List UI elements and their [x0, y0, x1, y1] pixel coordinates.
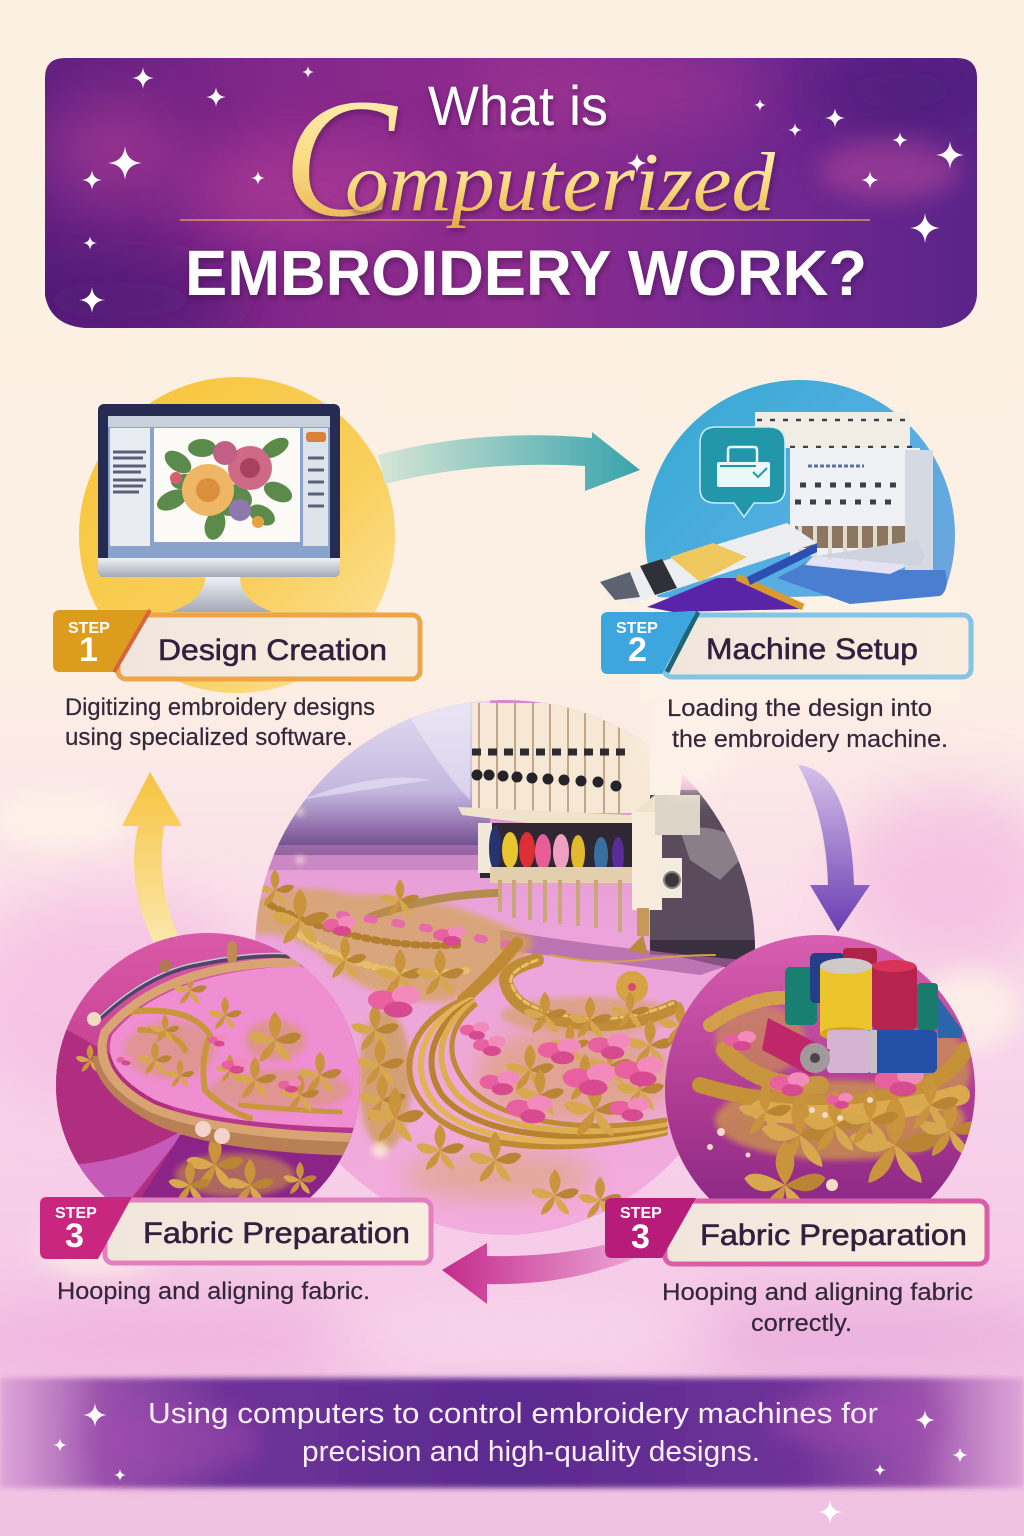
heading: Embroidery Work: EMBROIDERY WORK?	[185, 237, 867, 309]
left step 3 description: Hooping and aligning fabric.	[57, 1278, 370, 1305]
summary text: Using computers to control embroidery machines for	[148, 1398, 878, 1430]
step 2 label: STEP	[616, 620, 658, 637]
right step 3 label: STEP	[620, 1205, 662, 1222]
right step 3 description: Hooping and aligning fabric	[662, 1279, 973, 1306]
step 2 description	[667, 695, 948, 753]
step 2 circle with machine	[600, 380, 960, 700]
step 1 circle with monitor	[79, 377, 395, 693]
heading: Fabric Preparation: Fabric Preparation	[700, 1219, 967, 1252]
arrow: back to step 1	[122, 772, 182, 945]
step 1 label: STEP	[68, 620, 110, 637]
right step 3 description: correctly.	[751, 1310, 852, 1337]
sparkle glow	[294, 806, 390, 1160]
left step 3 label: 3	[65, 1217, 84, 1255]
step 2 label	[601, 612, 971, 677]
left step 3 label: STEP	[55, 1205, 97, 1222]
heading: Computerized: omputerized	[345, 136, 776, 229]
gold embroidery pattern	[256, 869, 715, 1218]
gold motifs below hoop	[76, 1044, 317, 1205]
right thread spools photo circle	[665, 935, 975, 1198]
step 1 label	[53, 610, 420, 679]
heading: Design Creation: Design Creation	[158, 634, 387, 667]
embroidery hoop tray	[600, 523, 817, 612]
step 1 description: Digitizing embroidery designs	[65, 694, 375, 721]
center embroidery machine circle	[250, 680, 770, 1250]
icon: computer monitor	[98, 404, 340, 612]
right step 3 label: 3	[631, 1218, 650, 1256]
summary text	[148, 1398, 878, 1468]
title banner	[45, 58, 977, 328]
icon: thread spools	[762, 948, 962, 1076]
right step 3 label	[605, 1198, 987, 1264]
heading: What is: What is	[428, 74, 608, 137]
machine heads	[755, 412, 933, 570]
heading: Computerized	[283, 64, 776, 252]
left step 3 label	[40, 1197, 431, 1263]
heading: Machine Setup: Machine Setup	[706, 633, 918, 666]
step 2 description: the embroidery machine.	[672, 726, 948, 753]
left hoop photo circle	[56, 933, 360, 1198]
step 2 label: 2	[628, 631, 647, 669]
step 1 description: using specialized software.	[65, 724, 353, 751]
gold motifs inside hoop	[116, 972, 350, 1118]
arrow: step 3 back along the cycle	[442, 1235, 640, 1304]
icon: wooden hoop	[100, 953, 365, 1148]
right step 3 description	[662, 1279, 973, 1337]
white floor fade under machine	[640, 590, 960, 700]
heading: Fabric Preparation: Fabric Preparation	[143, 1217, 410, 1250]
arrow: step 1 to step 2	[378, 432, 640, 491]
summary text: precision and high-quality designs.	[302, 1436, 760, 1468]
arrow: step 2 to step 3	[798, 765, 870, 932]
embroidery machine head	[458, 703, 700, 955]
heading: Computerized: C	[283, 64, 398, 252]
step 1 description	[65, 694, 375, 751]
flower design	[154, 434, 295, 542]
icon: toolbox bubble	[700, 427, 785, 517]
step 1 label: 1	[79, 631, 98, 669]
step 2 description: Loading the design into	[667, 695, 932, 722]
bottom summary band	[0, 1378, 1024, 1524]
